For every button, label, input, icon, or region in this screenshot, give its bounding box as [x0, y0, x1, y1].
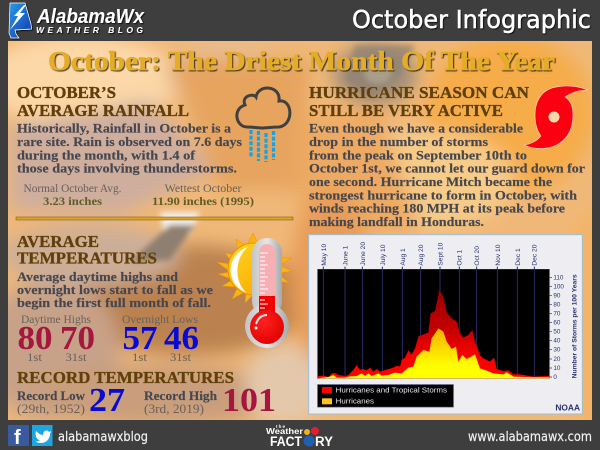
logo: The Weather Factory: FACT — [270, 434, 303, 449]
icon: hurricane symbol — [524, 86, 588, 149]
value axis title: Number of Storms per 100 Years — [573, 274, 579, 378]
value axis labels: 50 — [553, 329, 561, 336]
legend: Hurricanes — [336, 397, 374, 406]
text block: hurricane description: Even though we have a considerable — [309, 120, 523, 136]
stat: record low: (29th, 1952) — [17, 401, 85, 416]
icon: Facebook: f — [14, 427, 21, 449]
NOAA credit: NOAA — [555, 403, 580, 412]
date gridlines — [323, 267, 534, 378]
value: high on the 1st: 80 — [18, 320, 52, 357]
area: hurricanes — [318, 328, 549, 378]
value axis labels: 0 — [553, 374, 557, 381]
panel: hurricane season — [309, 83, 588, 229]
text block: temperature description: Average daytime highs and — [17, 269, 179, 284]
icon: sun and thermometer — [217, 233, 292, 348]
heading: October's average rainfall: OCTOBER’S — [17, 83, 116, 102]
value axis labels: 90 — [553, 292, 561, 299]
text block: hurricane description: winds reaching 180 MPH at its peak before — [309, 201, 565, 216]
stat: wettest October: 11.90 inches (1995) — [152, 194, 254, 208]
date axis labels — [321, 242, 539, 266]
logo: The Weather Factory: Weather — [266, 427, 303, 436]
value axis labels: 30 — [553, 347, 561, 354]
text block: rainfall description: those days involving thunderstorms. — [17, 161, 237, 176]
logo: The Weather Factory: the — [276, 424, 285, 429]
stat: record low — [17, 382, 125, 419]
logo: AlabamaWx Weather Blog: WEATHER BLOG — [36, 25, 143, 35]
text block: temperature description: begin the first full month of fall. — [17, 295, 211, 310]
text block: rainfall description: rare site. Rain is observed on 7.6 days — [17, 134, 242, 149]
stat: normal October average: Normal October Avg. — [24, 181, 122, 195]
panel: average temperatures — [17, 232, 292, 364]
date axis labels: Nov 10 — [495, 244, 502, 266]
plot area — [318, 269, 549, 378]
stat: record high: (3rd, 2019) — [144, 401, 204, 416]
heading: hurricane season: HURRICANE SEASON CAN — [309, 83, 530, 102]
value axis labels: 20 — [553, 356, 561, 363]
stat: record high — [144, 382, 276, 419]
heading: record temperatures: RECORD TEMPERATURES — [17, 368, 234, 387]
date axis labels: Aug 20 — [418, 244, 425, 266]
label: overnight lows: Overnight Lows — [122, 312, 198, 326]
footer: social icons and handle — [8, 425, 148, 449]
value axis labels: 10 — [553, 365, 561, 372]
text block: rainfall description: Historically, Rainfall in October is a — [17, 120, 232, 136]
date axis labels: June 1 — [342, 245, 349, 266]
value: low on the 31st: 31st — [170, 350, 192, 364]
date axis labels: Aug 1 — [400, 248, 407, 266]
logo: AlabamaWx Weather Blog — [9, 3, 145, 38]
text block: rainfall description: during the month, with 1.4 of — [17, 147, 196, 162]
divider — [16, 217, 293, 220]
legend — [318, 385, 453, 407]
text block: hurricane description: from the peak on September 10th to — [309, 147, 527, 162]
date axis labels: July 10 — [380, 244, 387, 266]
icon: rain cloud — [237, 88, 290, 162]
logo: The Weather Factory: RY — [315, 434, 333, 449]
value: low on the 31st: 46 — [164, 320, 199, 357]
stat: record high: Record High — [144, 388, 218, 403]
text block: hurricane description: one second. Hurricane Mitch became the — [309, 174, 552, 189]
stat: record high: 101 — [222, 382, 276, 419]
label: daytime highs: Daytime Highs — [21, 312, 91, 326]
icon: Alabama state with lightning bolt — [9, 3, 32, 38]
value axis labels — [553, 274, 564, 381]
value axis labels: 60 — [553, 320, 561, 327]
text block: hurricane description: strongest hurricane to form in October, with — [309, 187, 578, 202]
date axis labels: Oct 1 — [457, 249, 464, 266]
header title: October Infographic: October Infographic — [352, 5, 591, 34]
text block: temperature description: overnight lows start to fall as we — [17, 282, 213, 297]
value: low on the 1st: 1st — [132, 350, 148, 364]
main title: October: The Driest Month Of The Year — [48, 45, 555, 76]
heading: hurricane season: STILL BE VERY ACTIVE — [309, 101, 503, 120]
text block: hurricane description: making landfall in Honduras. — [309, 214, 484, 229]
logo: The Weather Factory — [266, 424, 333, 449]
value: low on the 1st: 57 — [122, 320, 158, 357]
value: high on the 1st: 1st — [27, 350, 43, 364]
stat: record low: 27 — [89, 382, 125, 419]
value axis labels: 110 — [553, 274, 564, 281]
chart: storm frequency by date — [309, 235, 582, 414]
chart frame — [309, 235, 582, 414]
date axis labels: Sept 10 — [437, 242, 444, 266]
panel: record temperatures — [17, 368, 276, 419]
heading: average temperatures: AVERAGE — [17, 232, 99, 251]
date axis labels: Oct 20 — [474, 246, 481, 266]
icon: Twitter — [32, 425, 52, 446]
date axis labels: May 10 — [321, 244, 328, 266]
date axis labels: Dec 20 — [532, 244, 539, 266]
handle: alabamawxblog — [58, 430, 148, 445]
value axis labels: 70 — [553, 310, 561, 317]
panel: average rainfall — [17, 83, 290, 208]
logo: AlabamaWx Weather Blog: AlabamaWx — [36, 5, 145, 28]
stat: record low: Record Low — [17, 388, 86, 403]
legend: Hurricanes and Tropical Storms — [336, 385, 447, 394]
value axis labels: 40 — [553, 338, 561, 345]
stat: wettest October: Wettest October — [164, 181, 242, 195]
value axis labels: 80 — [553, 301, 561, 308]
date axis labels: Dec 1 — [515, 248, 522, 266]
stat: normal October average: 3.23 inches — [43, 194, 102, 208]
date axis labels: June 20 — [360, 242, 367, 266]
value axis ticks — [549, 277, 552, 377]
heading: October's average rainfall: AVERAGE RAINFALL — [17, 101, 189, 120]
heading: average temperatures: TEMPERATURES — [17, 248, 157, 268]
area: hurricanes and tropical storms — [318, 290, 549, 378]
value: high on the 31st: 31st — [66, 350, 87, 364]
value: high on the 31st: 70 — [60, 320, 95, 357]
text block: hurricane description: drop in the number of storms — [309, 134, 488, 149]
text block: hurricane description: October 1st, we cannot let our guard down for — [309, 161, 585, 176]
value axis labels: 100 — [553, 283, 564, 290]
